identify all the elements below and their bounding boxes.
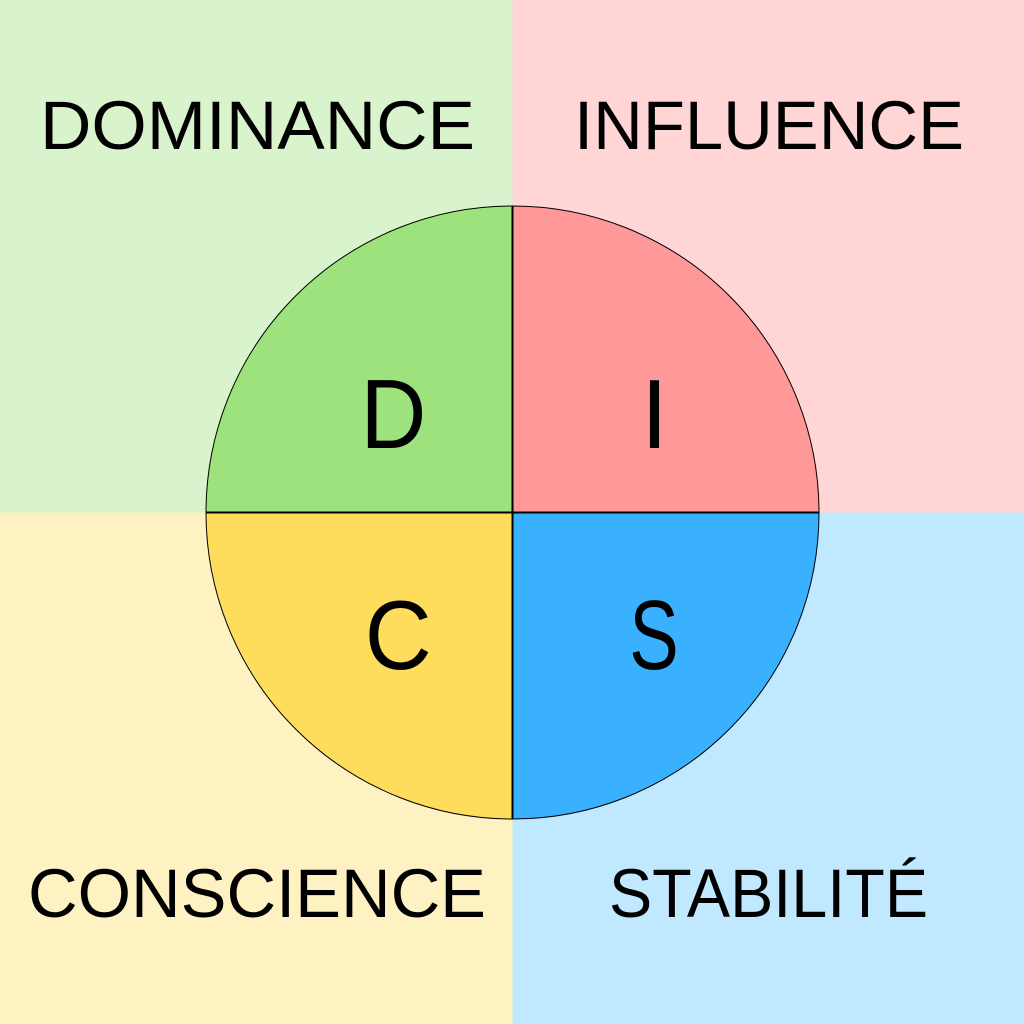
- letter: C: C: [365, 580, 432, 690]
- heading: influence: INFLUENCE: [574, 87, 964, 164]
- heading: stabilite: STABILITÉ: [609, 855, 928, 932]
- letter: S: S: [629, 580, 679, 690]
- circle quadrant: S blue: [512, 512, 819, 819]
- heading: conscience: CONSCIENCE: [28, 855, 486, 932]
- heading: dominance: DOMINANCE: [40, 87, 475, 164]
- horizontal divider: [206, 512, 819, 514]
- vertical divider: [512, 206, 514, 819]
- circle quadrant: I red: [512, 206, 819, 512]
- circle quadrant: D green: [206, 206, 512, 512]
- panel: influence background: [512, 0, 1024, 512]
- panel: dominance background: [0, 0, 512, 512]
- letter: D: D: [360, 359, 426, 469]
- circle quadrant: C yellow: [206, 512, 512, 819]
- panel: stabilite background: [512, 512, 1024, 1024]
- letter: I: I: [641, 359, 668, 469]
- panel: conscience background: [0, 512, 512, 1024]
